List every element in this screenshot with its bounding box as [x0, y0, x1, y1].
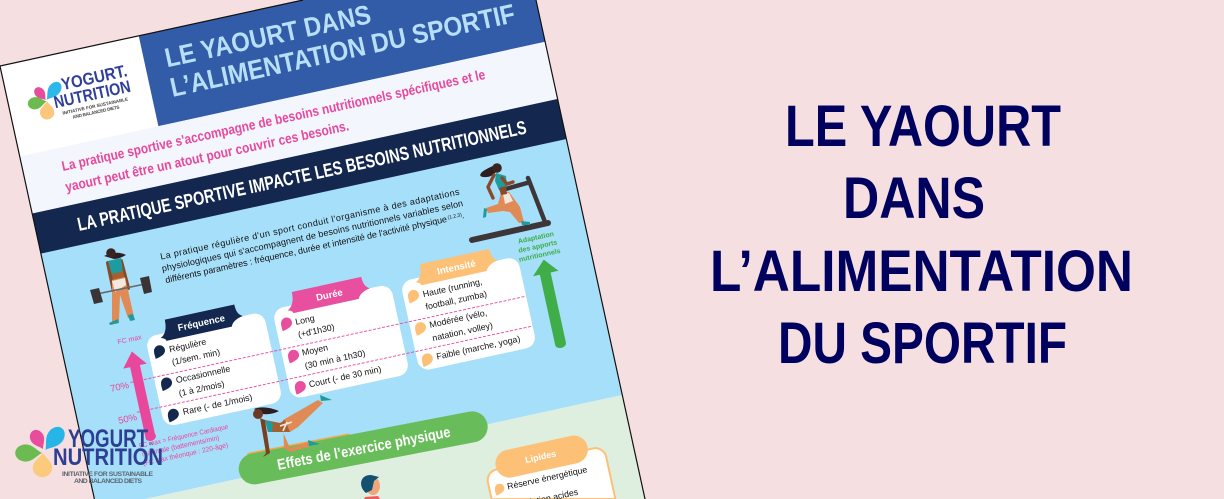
- card: Intensité: [397, 243, 537, 372]
- title: right headline: L’ALIMENTATION: [710, 239, 1133, 304]
- arrow: nutritional needs: [530, 257, 575, 351]
- card: Intensité: natation, volley): [431, 320, 494, 343]
- card: Lipides: Réserve énergétique: [506, 464, 588, 491]
- overlay logo: Yogurt in Nutrition: IN: [149, 441, 153, 446]
- card: Durée: [269, 271, 410, 400]
- small logo: NUTRITION: [52, 77, 132, 112]
- title: right headline: [710, 94, 1133, 376]
- overlay logo: Yogurt in Nutrition: AND BALANCED DIETS: [74, 478, 142, 485]
- adaptation label: Adaptation: [517, 231, 555, 246]
- card: Fréquence: Occasionnelle: [175, 364, 231, 385]
- icon: plank woman: [253, 395, 332, 457]
- yoga mat: [246, 433, 353, 467]
- title: right headline: DU SPORTIF: [778, 311, 1067, 376]
- intro paragraph: physiologiques qui s'accompagnent de besoins nutritionnels variables selon: [161, 198, 464, 274]
- panel: green section background: [145, 395, 645, 499]
- section pill: effects of exercise: [236, 409, 490, 487]
- adaptation label: nutritionnels: [518, 248, 561, 264]
- overlay logo: Yogurt in Nutrition: NUTRITION: [53, 444, 163, 471]
- title: right headline: LE YAOURT: [785, 94, 1061, 159]
- overlay logo: Yogurt in Nutrition: [15, 423, 163, 485]
- intro band: [20, 42, 558, 214]
- card: Fréquence: (1 à 2/mois): [178, 379, 225, 398]
- panel: tilted page sheet: [0, 0, 645, 499]
- icon: weightlifter: [90, 248, 152, 325]
- icon: man figure: [361, 475, 380, 499]
- card: Intensité: Modérée (vélo,: [428, 308, 488, 330]
- heart rate labels: 70%: [109, 380, 131, 395]
- intro paragraph: différents paramètres : fréquence, durée et intensité de l'activité physique: [164, 214, 448, 285]
- card: Fréquence: (1/sem. min): [171, 347, 221, 367]
- adaptation label: des apports: [518, 239, 558, 255]
- card: Lipides: Lipides: [524, 449, 557, 465]
- card: Intensité: football, zumba): [425, 289, 488, 312]
- adaptation label: [515, 230, 561, 264]
- overlay logo: Yogurt in Nutrition: INITIATIVE FOR SUSTAINABLE: [62, 471, 153, 478]
- intro paragraph: .: [460, 210, 465, 221]
- card: Intensité: Haute (running,: [422, 276, 483, 299]
- card: Durée: (30 min à 1h30): [304, 348, 366, 371]
- small logo: YOGURT.: [59, 61, 129, 94]
- heart rate labels: maximale (battements/min): [141, 435, 220, 459]
- card: Intensité: Faible (marche, yoga): [435, 334, 521, 362]
- card: Durée: Durée: [315, 287, 344, 304]
- heart rate labels: [100, 320, 233, 471]
- card: Fréquence: Régulière: [168, 337, 207, 354]
- intro paragraph: (1,2,3): [447, 212, 463, 221]
- heart rate labels: (FC max théorique : 220-âge): [142, 442, 229, 468]
- icon: treadmill runner: [472, 163, 548, 240]
- small logo: AND BALANCED DIETS: [72, 105, 120, 120]
- heart rate labels: 50%: [117, 412, 139, 427]
- panel: title band background: [139, 0, 545, 126]
- section heading band: [32, 99, 567, 254]
- section pill: effects of exercise: Effets de l’exercice physique: [276, 424, 452, 474]
- title: right headline: DANS: [843, 166, 985, 231]
- card: Durée: (+d'1h30): [297, 322, 335, 340]
- intro band: yaourt peut être un atout pour couvrir ces besoins.: [64, 117, 350, 195]
- card: Fréquence: Fréquence: [177, 313, 226, 334]
- panel: blue section background: [41, 139, 622, 499]
- intro band: La pratique sportive s'accompagne de besoins nutritionnels spécifiques et le: [60, 66, 487, 174]
- heart rate labels: FC max: [117, 334, 143, 346]
- card: Intensité: Intensité: [436, 258, 477, 277]
- heart rate labels: FC max = Fréquence Cardiaque: [139, 424, 229, 450]
- small logo: INITIATIVE FOR SUSTAINABLE: [62, 97, 128, 116]
- card: Fréquence: Rare (- de 1/mois): [182, 392, 253, 417]
- intro paragraph: La pratique régulière d'un sport conduit l'organisme à des adaptations: [159, 187, 461, 262]
- arrow: heart rate: [120, 349, 163, 443]
- small logo: [23, 61, 135, 128]
- section heading band: LA PRATIQUE SPORTIVE IMPACTE LES BESOINS NUTRITIONNELS: [76, 118, 528, 236]
- card: Durée: Long: [294, 313, 316, 327]
- card: Fréquence: [142, 299, 283, 427]
- page outline: [0, 0, 645, 499]
- heart rate threshold lines: [130, 296, 533, 412]
- panel: tilted page content: [3, 0, 644, 499]
- overlay logo: Yogurt in Nutrition: YOGURT: [68, 425, 148, 453]
- card: Durée: Court (- de 30 min): [308, 364, 382, 389]
- card: Lipides: [482, 429, 615, 499]
- card: Durée: Moyen: [301, 342, 329, 358]
